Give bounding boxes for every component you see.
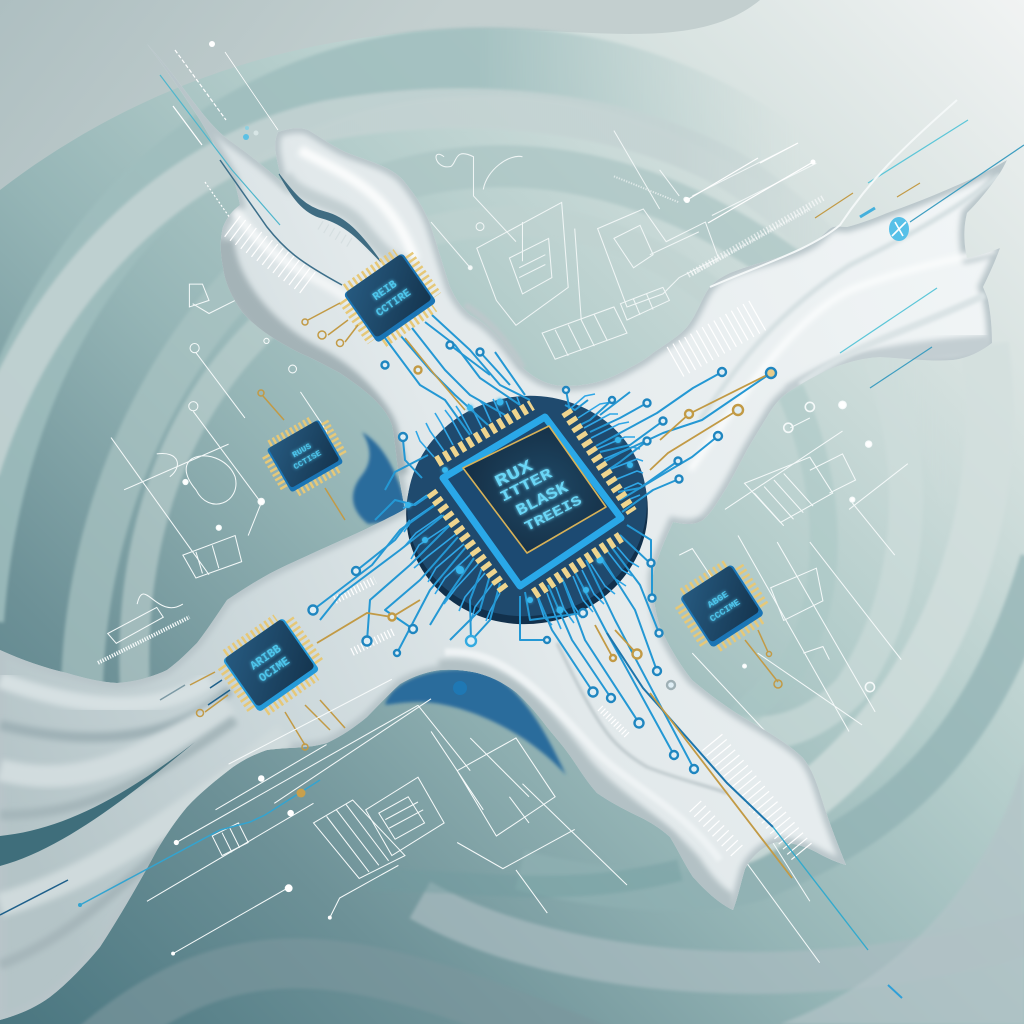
circuit disk	[392, 380, 662, 640]
trace: long diagonal gold	[595, 625, 792, 878]
glowing disk nodes	[405, 398, 633, 614]
main chip label text: TREEIS	[522, 493, 585, 536]
ribbon: dark crease upper lobe	[279, 174, 381, 262]
disk trace fan: pins to disk edge	[403, 394, 643, 629]
blueprint line art: left	[98, 284, 327, 663]
accent lines: upper right	[684, 100, 1024, 388]
blueprint line art: top centre	[431, 131, 816, 359]
traces: south	[520, 525, 694, 769]
trace: gold west	[317, 600, 420, 643]
main chip top face	[463, 426, 606, 553]
main chip label text: BLASK	[513, 478, 572, 520]
chip: lower left	[217, 613, 325, 717]
blueprint line art: bottom	[147, 679, 627, 955]
dark blue accent: left of disk	[353, 432, 410, 524]
trace: gold from upper chip	[405, 338, 465, 410]
chip: right	[674, 559, 770, 653]
gold lead: right chip	[745, 630, 782, 688]
main chip	[431, 405, 632, 594]
traces: west	[313, 440, 500, 653]
gold lead: left chip	[258, 390, 345, 520]
label: RUUS	[291, 441, 313, 460]
pins	[338, 248, 442, 348]
pins	[674, 559, 770, 653]
main chip label text: ITTER	[498, 466, 555, 506]
label: REIB	[371, 279, 400, 304]
label: ABGE	[705, 589, 731, 611]
main chip label text: RUX	[492, 457, 537, 492]
node on lower accent	[453, 681, 467, 695]
gold leads: upper left chip	[302, 303, 358, 346]
pins	[262, 415, 348, 497]
traces: gold north-east	[650, 373, 771, 470]
dark blue accent: below disk	[385, 670, 566, 775]
label: ARIBB	[248, 643, 284, 673]
leads: lower left chip	[160, 672, 345, 750]
hatched patches on ribbons	[232, 225, 802, 852]
ribbon: dark gap between lower left folds	[0, 742, 195, 866]
label: OCIME	[257, 655, 293, 686]
label: CCTISE	[292, 448, 323, 472]
label: CCTIRE	[374, 287, 414, 320]
traces: from upper chip to disk	[385, 315, 530, 435]
bottom accent lines and nodes	[0, 780, 902, 998]
pins	[217, 613, 325, 717]
ribbon: thin crease line	[220, 160, 342, 285]
trace: long diagonal cyan	[773, 827, 868, 950]
chip: left	[262, 415, 348, 497]
ribbon: side strand	[465, 305, 523, 368]
main chip gold pins	[431, 405, 632, 594]
trace: long diagonal blue	[607, 633, 773, 827]
trace end nodes	[308, 342, 776, 773]
chip: upper left	[338, 248, 442, 348]
icon: round marker upper right	[889, 217, 909, 241]
label: CCCIME	[708, 597, 743, 625]
accent lines: upper left	[160, 41, 280, 225]
main chip label text	[492, 457, 585, 536]
main chip blue frame	[443, 417, 621, 586]
blueprint line art: right	[653, 401, 908, 963]
traces: north-east	[565, 372, 771, 512]
